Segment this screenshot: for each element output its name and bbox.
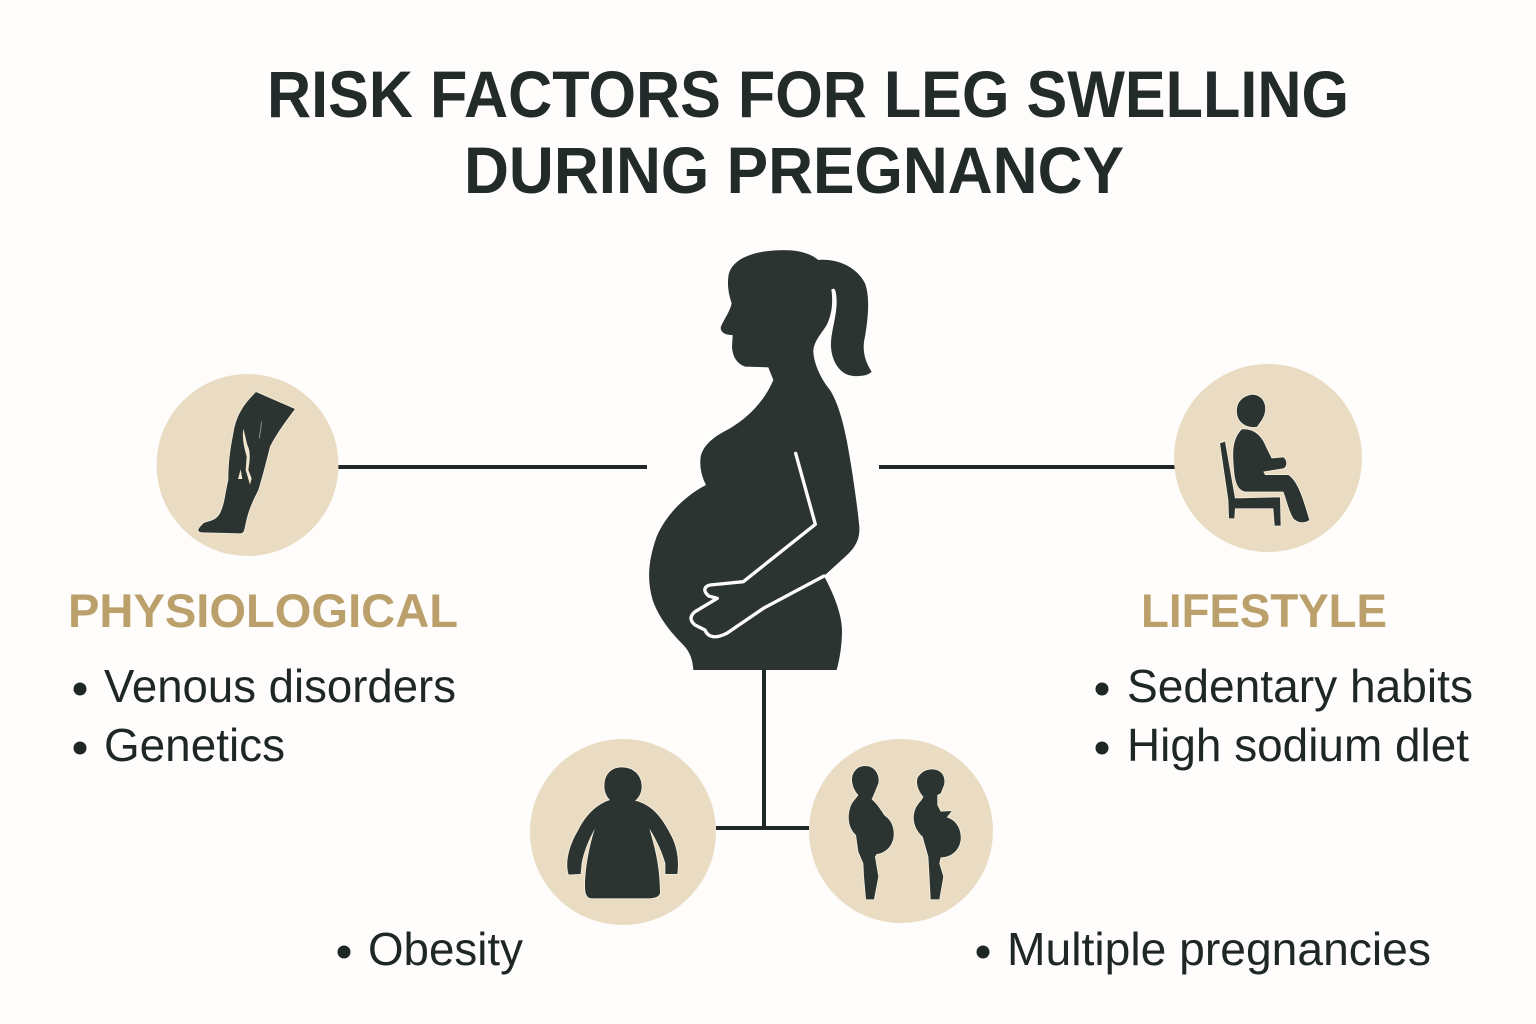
icon: obese figure [530,739,716,925]
list: lifestyle factors: Sedentary habits [1127,660,1473,712]
heading: physiological: PHYSIOLOGICAL [68,584,458,637]
list: physiological factors: Venous disorders [104,660,456,712]
icon: seated person [1174,364,1362,552]
label: obesity: Obesity [368,923,523,975]
list: physiological factors [74,660,456,771]
list: physiological factors: Genetics [104,719,285,771]
heading: lifestyle: LIFESTYLE [1141,584,1387,637]
list: lifestyle factors: High sodium dlet [1127,719,1469,771]
title: DURING PREGNANCY [464,133,1124,207]
label: multiple pregnancies: Multiple pregnancies [1007,923,1431,975]
connector: right [879,465,1175,469]
central pregnant woman silhouette [649,250,872,670]
title: RISK FACTORS FOR LEG SWELLING [267,57,1349,131]
panel: lifestyle [1096,364,1473,771]
title [267,57,1349,207]
connector: left [338,465,647,469]
panel: multiple pregnancies [809,739,1431,975]
panel: obesity [338,739,716,975]
list: lifestyle factors [1096,660,1473,771]
icon: two pregnant figures [809,739,993,923]
connector: bottom [716,670,809,828]
panel: physiological [68,374,458,771]
icon: leg with veins [156,374,338,556]
